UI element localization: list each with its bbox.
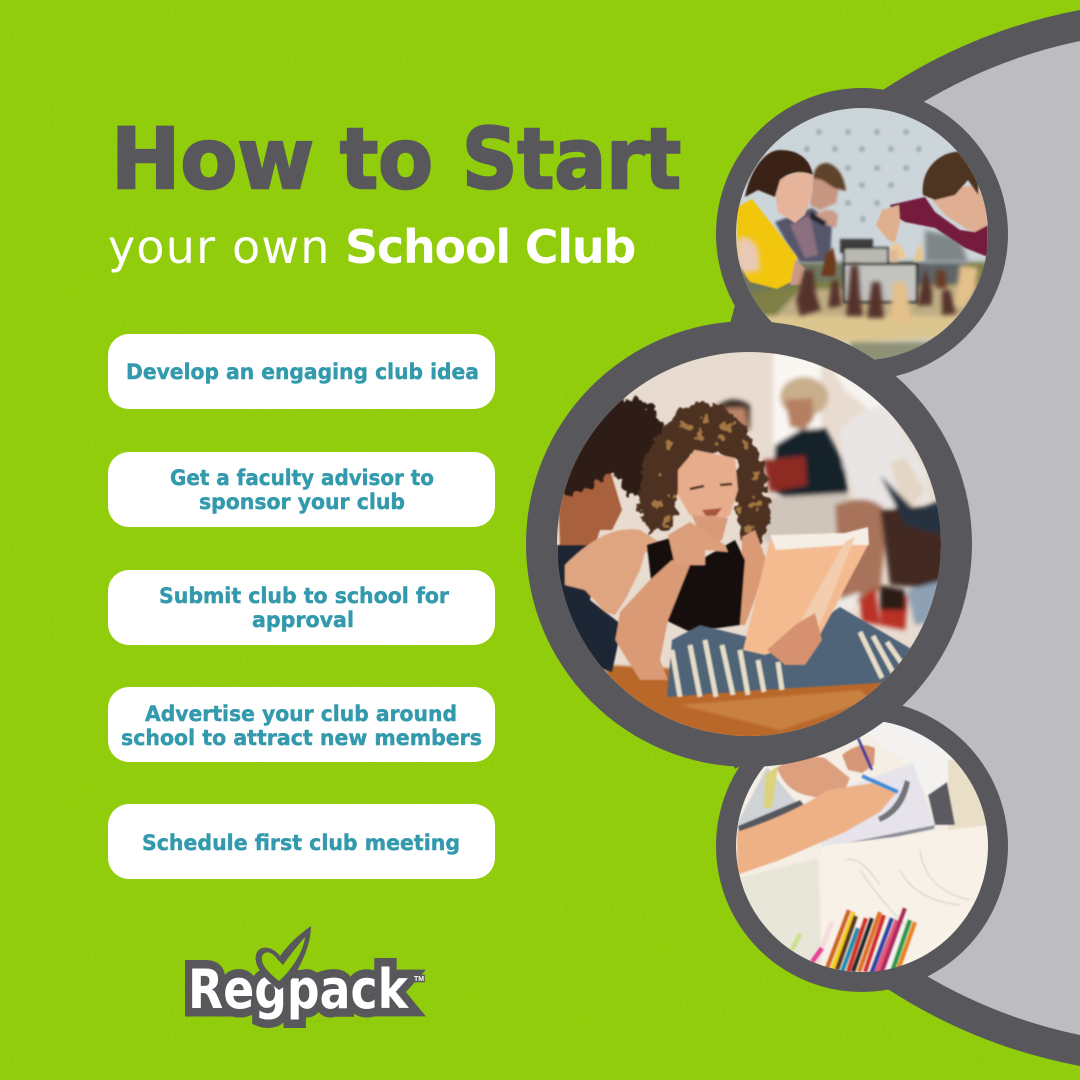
icon: heart check (256, 926, 311, 990)
trademark: TM (414, 976, 424, 983)
background people (713, 350, 945, 630)
wooden floor (604, 664, 886, 736)
table (739, 258, 986, 360)
man in background (775, 163, 846, 262)
step 4: Advertise your club around (145, 702, 457, 727)
Regpack logo (188, 926, 424, 1021)
title (108, 110, 681, 274)
title line: How to Start (111, 110, 681, 208)
striped pillow (667, 607, 913, 697)
step 2: Get a faculty advisor to (170, 466, 434, 491)
step 5 (108, 804, 495, 879)
step 2: sponsor your club (199, 490, 405, 515)
step 3 (108, 570, 495, 645)
wall pattern (804, 129, 922, 222)
step 1: Develop an engaging club idea (126, 360, 479, 385)
step 2 (108, 452, 495, 527)
notebook and protractor (821, 764, 936, 846)
step 1 (108, 334, 495, 409)
step 5: Schedule first club meeting (142, 831, 460, 856)
left student (557, 399, 671, 672)
step 4 (108, 687, 495, 762)
photo circle: students playing chess (716, 88, 1008, 380)
curly haired student (615, 403, 770, 680)
subtitle: your own School Club: School Club (345, 220, 635, 274)
drawing paper (740, 825, 987, 965)
large grey backdrop circle (880, 10, 1080, 1066)
title line: How to Start: to (340, 110, 433, 208)
title line: How to Start: Start (462, 110, 681, 208)
white shirt and chair (737, 722, 986, 832)
step 3: approval (252, 608, 354, 633)
hands with pencils (737, 738, 898, 875)
chess clocks and pieces (821, 239, 923, 302)
photo circle: students reading (526, 321, 972, 767)
title line: How to Start: How (111, 110, 314, 208)
coloured pencils (792, 908, 915, 974)
step 4: school to attract new members (121, 726, 482, 751)
open book and hand (743, 527, 869, 665)
subtitle: your own School Club: your own (108, 220, 331, 274)
step 3: Submit club to school for (159, 584, 449, 609)
girl in yellow sweater (737, 150, 813, 289)
curly hair (639, 403, 770, 550)
logo wordmark: Regpack (188, 958, 409, 1021)
boy in maroon sweater (876, 152, 988, 262)
photo circle: students drawing (716, 700, 1008, 992)
